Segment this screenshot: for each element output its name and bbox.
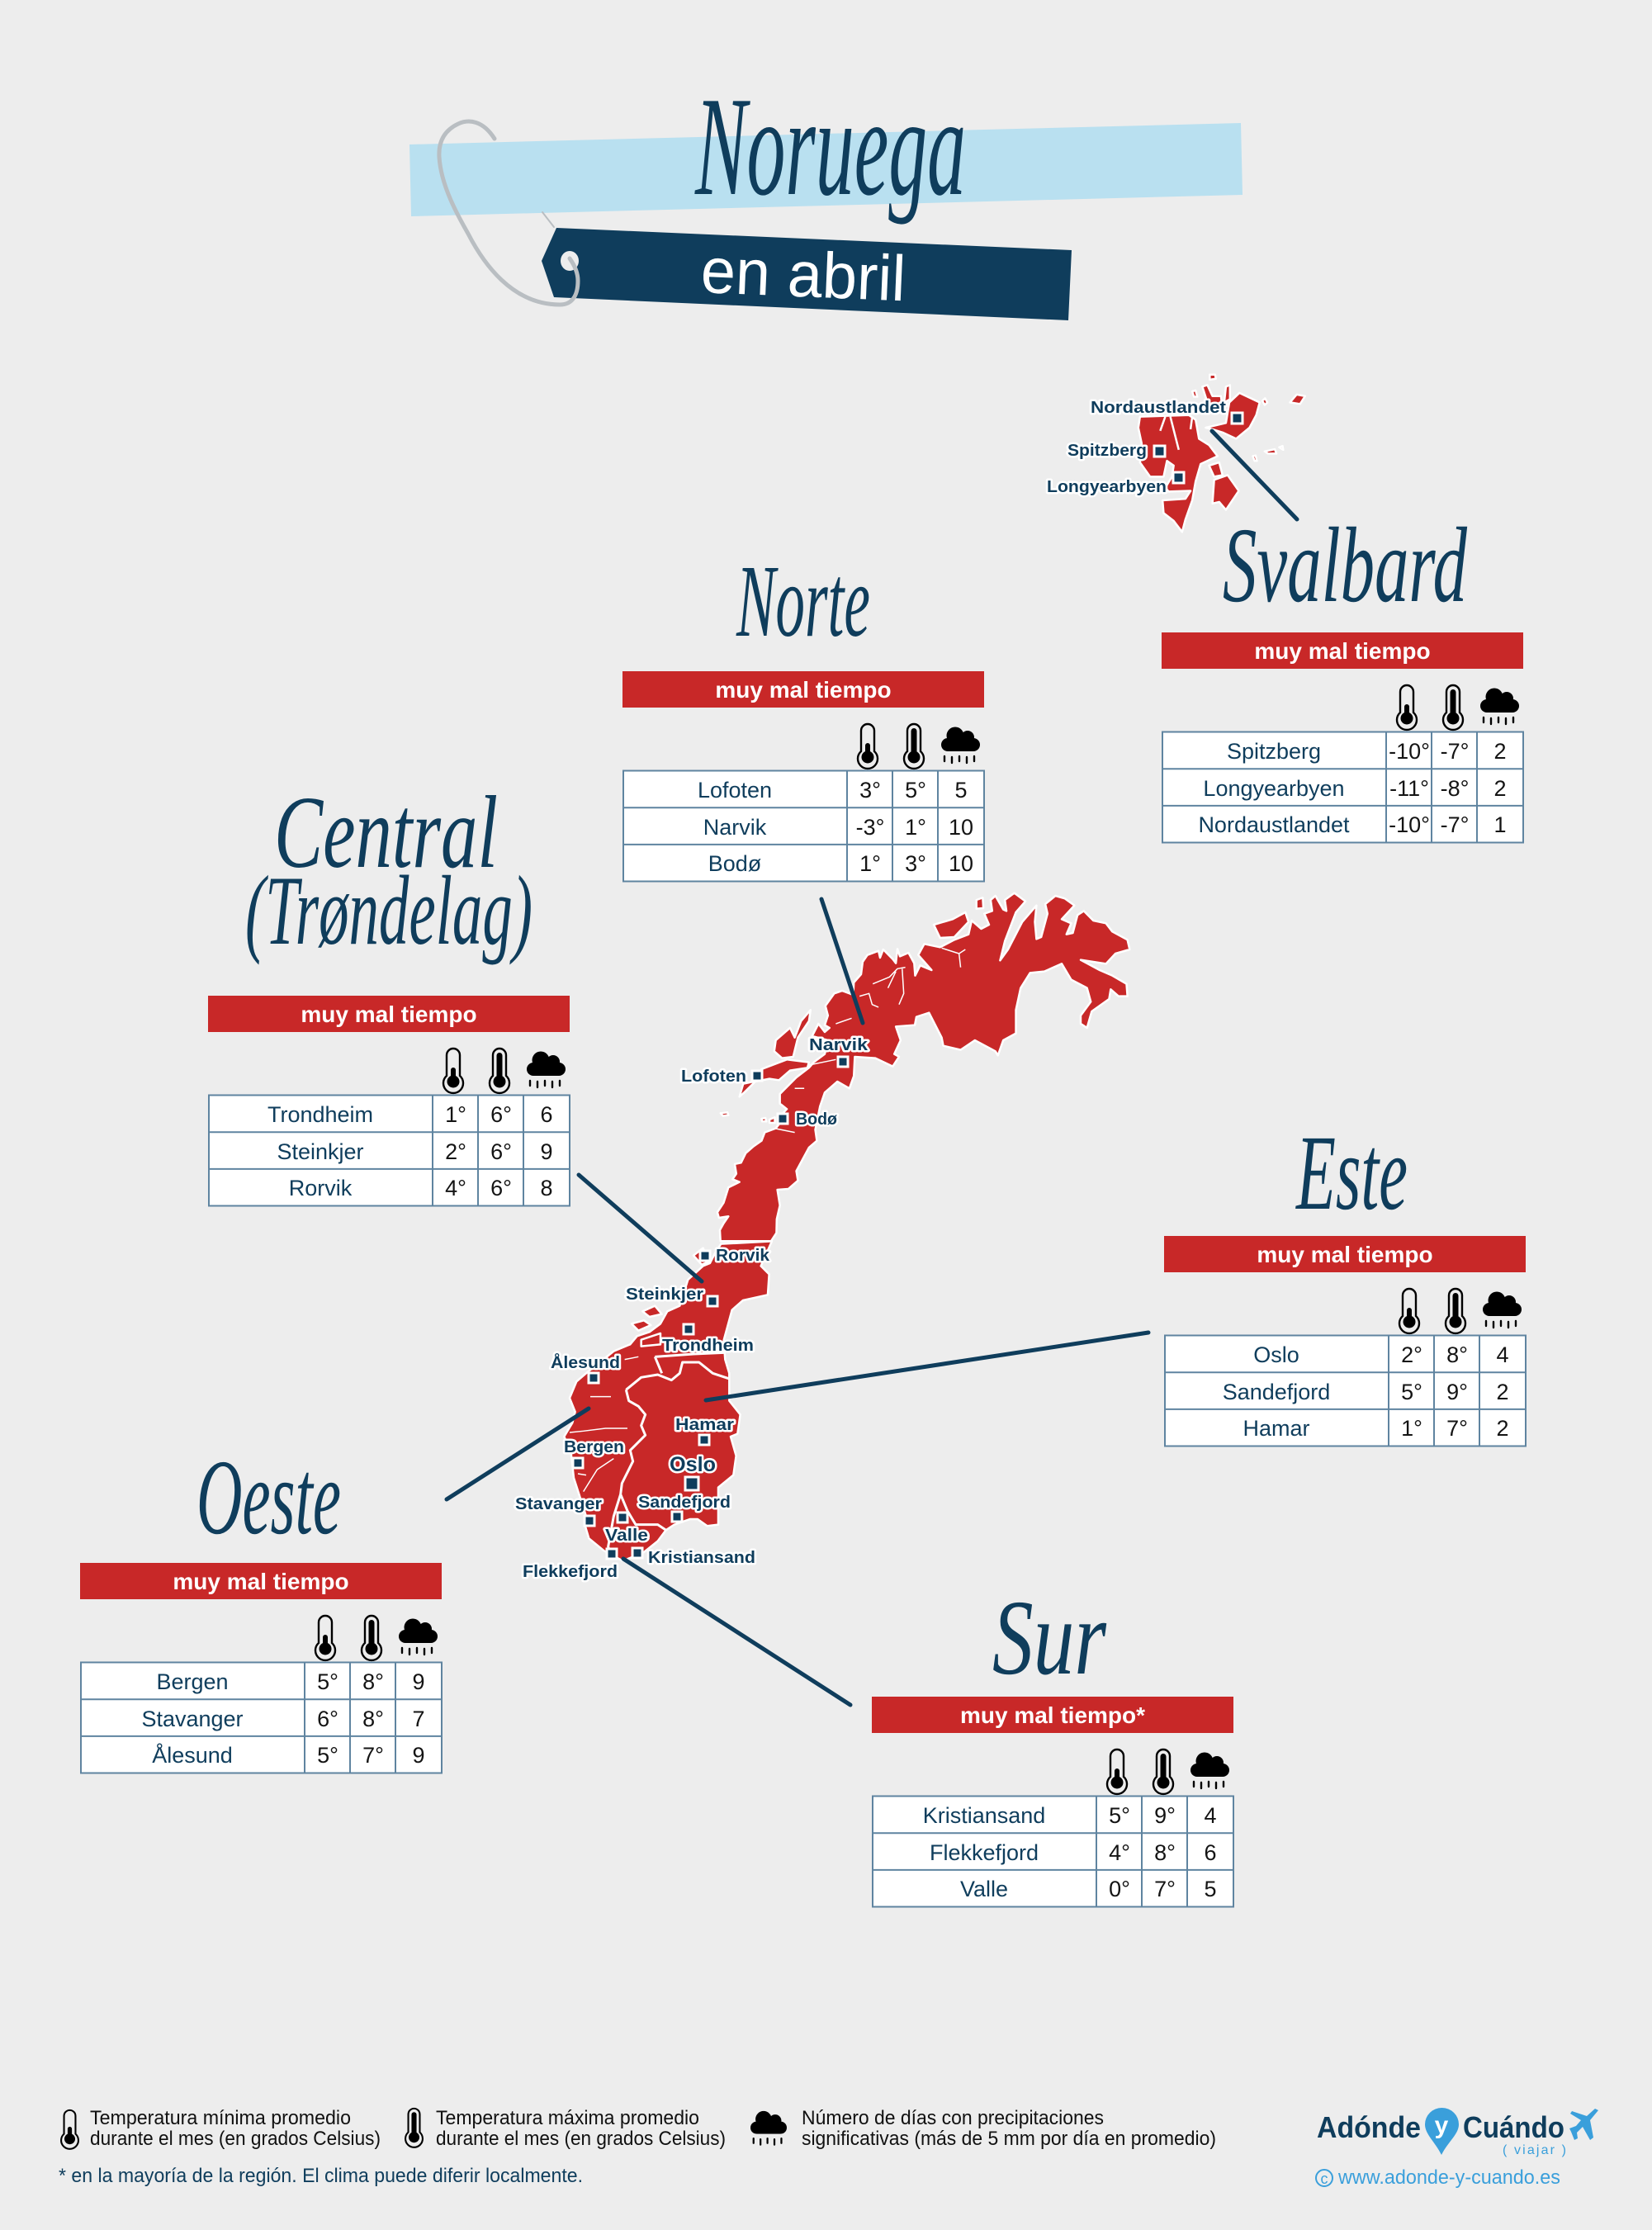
climate table: Rorvik xyxy=(289,1176,353,1200)
legend text: maximum temperature: Temperatura máxima promedio xyxy=(436,2107,699,2129)
label: Longyearbyen: Longyearbyen xyxy=(1047,478,1167,496)
climate table xyxy=(209,1095,570,1205)
panel: Este xyxy=(1164,1114,1526,1446)
leader line: Norte xyxy=(821,899,863,1023)
status band: muy mal tiempo xyxy=(173,1569,349,1594)
climate table: -10° xyxy=(1389,739,1430,764)
climate table: 9° xyxy=(1154,1803,1176,1828)
climate table: -10° xyxy=(1389,812,1430,837)
status band: muy mal tiempo xyxy=(1254,638,1431,664)
climate table: -8° xyxy=(1441,776,1469,801)
panel: Norte xyxy=(622,545,984,882)
marker: Rorvik xyxy=(700,1251,710,1261)
column icons xyxy=(858,724,980,769)
heading: Oeste: Oeste xyxy=(196,1438,341,1557)
legend text: precipitation xyxy=(802,2107,1216,2150)
marker: Nordaustlandet xyxy=(1232,413,1243,424)
legend text: minimum temperature xyxy=(90,2107,381,2150)
climate table: 8° xyxy=(362,1669,384,1694)
light blue title strip xyxy=(409,123,1243,216)
logo plane xyxy=(1569,2109,1598,2140)
climate table: 3° xyxy=(905,851,926,876)
climate table: 2 xyxy=(1496,1416,1509,1441)
climate table: Ålesund xyxy=(152,1742,233,1768)
climate table: Kristiansand xyxy=(923,1803,1045,1828)
climate table: 3° xyxy=(859,778,881,803)
leader line: Sur xyxy=(623,1559,850,1705)
climate table: 4 xyxy=(1496,1342,1509,1367)
climate table: Narvik xyxy=(703,815,767,840)
climate table: 4° xyxy=(1109,1840,1130,1865)
climate table: 8 xyxy=(540,1176,553,1200)
climate table: -11° xyxy=(1389,776,1429,801)
climate table: -7° xyxy=(1441,812,1469,837)
climate table: 6° xyxy=(317,1707,338,1731)
climate table: Bergen xyxy=(156,1669,229,1694)
leader line: Oeste xyxy=(447,1409,589,1499)
band and table: Oeste xyxy=(80,1563,442,1773)
climate table: 10 xyxy=(949,851,973,876)
label: Flekkefjord: Flekkefjord xyxy=(523,1563,618,1581)
marker: Lofoten xyxy=(752,1071,762,1081)
heading: Central (Trøndelag) xyxy=(245,776,533,965)
climate table: 10 xyxy=(949,815,973,840)
climate table: 5° xyxy=(317,1743,338,1768)
climate table: 8° xyxy=(362,1707,384,1731)
title block xyxy=(409,69,1243,320)
climate table: 8° xyxy=(1154,1840,1176,1865)
leader line: Central xyxy=(579,1175,702,1281)
climate table: 5 xyxy=(954,778,968,803)
label: Valle: Valle xyxy=(605,1527,648,1545)
climate table: 9 xyxy=(412,1743,425,1768)
label: Bergen: Bergen xyxy=(564,1438,624,1456)
band and table: Sur xyxy=(872,1697,1233,1907)
label: Stavanger: Stavanger xyxy=(515,1495,602,1513)
map of Svalbard xyxy=(1047,375,1305,532)
climate table: 2 xyxy=(1493,739,1507,764)
climate table xyxy=(623,771,984,882)
panel: Central (Trøndelag) xyxy=(208,776,570,1205)
climate table: 7° xyxy=(362,1743,384,1768)
label: Steinkjer: Steinkjer xyxy=(626,1285,703,1304)
climate table: 0° xyxy=(1109,1877,1130,1901)
marker: Spitzberg xyxy=(1154,446,1165,457)
legend text: minimum temperature: Temperatura mínima promedio xyxy=(90,2107,351,2129)
climate table: 5° xyxy=(1109,1803,1130,1828)
status band xyxy=(1162,632,1523,669)
climate table: Trondheim xyxy=(267,1102,373,1127)
status band: muy mal tiempo xyxy=(1257,1242,1433,1267)
climate table: 2 xyxy=(1496,1380,1509,1404)
climate table: Oslo xyxy=(1253,1342,1299,1367)
marker: Ålesund xyxy=(589,1373,599,1383)
climate table: Flekkefjord xyxy=(930,1840,1039,1865)
marker: Narvik xyxy=(838,1057,848,1067)
climate table: 2° xyxy=(1401,1342,1422,1367)
logo tagline: ( viajar ) xyxy=(1503,2143,1566,2157)
heading: Sur: Sur xyxy=(992,1579,1106,1697)
status band xyxy=(80,1563,442,1599)
legend text: maximum temperature: durante el mes (en grados Celsius) xyxy=(436,2128,726,2150)
climate table: 1° xyxy=(859,851,881,876)
column icons xyxy=(315,1616,438,1660)
marker: Kristiansand xyxy=(632,1548,642,1558)
southern Norway landmass xyxy=(564,1241,772,1560)
climate table: 9 xyxy=(412,1669,425,1694)
climate table: Valle xyxy=(960,1877,1008,1901)
climate table: 4 xyxy=(1204,1803,1217,1828)
marker: Valle xyxy=(618,1513,627,1522)
climate table: 7° xyxy=(1154,1877,1176,1901)
climate table: 5° xyxy=(317,1669,338,1694)
legend text: minimum temperature: durante el mes (en grados Celsius) xyxy=(90,2128,381,2150)
legend text: precipitation: significativas (más de 5 mm por día en promedio) xyxy=(802,2128,1216,2150)
climate table xyxy=(873,1797,1233,1907)
label: Hamar: Hamar xyxy=(675,1416,734,1434)
logo word: Cuándo: Cuándo xyxy=(1463,2110,1564,2144)
label: Ålesund: Ålesund xyxy=(551,1352,620,1372)
climate table: 7 xyxy=(412,1707,425,1731)
legend xyxy=(59,2107,1216,2187)
climate table: 4° xyxy=(445,1176,466,1200)
climate table: -7° xyxy=(1441,739,1469,764)
copyright and website: c xyxy=(1321,2171,1328,2187)
climate table: 6° xyxy=(490,1102,512,1127)
climate table: Nordaustlandet xyxy=(1198,812,1350,837)
subtitle: en abril: en abril xyxy=(699,234,907,315)
climate table: 1° xyxy=(1401,1416,1422,1441)
climate table: 9 xyxy=(540,1139,553,1164)
marker: Bergen xyxy=(573,1458,583,1468)
marker: Longyearbyen xyxy=(1173,472,1184,483)
climate table: Spitzberg xyxy=(1227,739,1321,764)
heading: Norte: Norte xyxy=(736,545,870,659)
column icons xyxy=(443,1049,566,1093)
legend icon: precipitation xyxy=(750,2111,787,2145)
marker: Sandefjord xyxy=(672,1512,682,1522)
climate table: Lofoten xyxy=(698,778,772,803)
status band xyxy=(1164,1236,1526,1272)
climate table: 5 xyxy=(1204,1877,1217,1901)
climate table: -3° xyxy=(856,815,884,840)
climate table: 9° xyxy=(1446,1380,1468,1404)
marker: Stavanger xyxy=(585,1516,594,1526)
map of mainland Norway xyxy=(515,893,1129,1581)
band and table: Central xyxy=(208,996,570,1205)
marker: Trondheim xyxy=(684,1324,693,1334)
status band xyxy=(208,996,570,1032)
status band: muy mal tiempo xyxy=(715,677,892,703)
label: Trondheim: Trondheim xyxy=(662,1337,754,1355)
climate table: Stavanger xyxy=(141,1707,244,1731)
heading: Svalbard: Svalbard xyxy=(1223,506,1468,625)
climate table: 1° xyxy=(905,815,926,840)
legend text: precipitation: Número de días con precipitaciones xyxy=(802,2107,1104,2129)
region dividers xyxy=(608,1352,729,1555)
footnote: * en la mayoría de la región. El clima puede diferir localmente. xyxy=(59,2165,583,2187)
climate table: Sandefjord xyxy=(1223,1380,1330,1404)
climate table: 6° xyxy=(490,1139,512,1164)
tag string xyxy=(439,121,578,305)
title: Noruega: Noruega xyxy=(694,69,966,225)
status band: muy mal tiempo xyxy=(301,1001,477,1027)
climate table: 8° xyxy=(1446,1342,1468,1367)
label: Rorvik: Rorvik xyxy=(716,1247,770,1265)
band and table: Svalbard xyxy=(1162,632,1523,842)
panel: Oeste xyxy=(80,1438,442,1773)
status band xyxy=(622,671,984,708)
marker: Flekkefjord xyxy=(607,1549,617,1559)
svalbard landmass xyxy=(1138,375,1305,532)
marker: Bodø xyxy=(778,1114,788,1124)
panel: Sur xyxy=(872,1579,1233,1907)
northern Norway landmass xyxy=(717,893,1129,1241)
logo word: Adónde: Adónde xyxy=(1317,2110,1421,2144)
marker: Oslo xyxy=(685,1477,698,1490)
legend icon: minimum temperature xyxy=(61,2110,78,2149)
logo pin xyxy=(1425,2108,1459,2155)
column icons xyxy=(1399,1289,1522,1333)
climate table: 6 xyxy=(540,1102,553,1127)
marker: Hamar xyxy=(699,1435,709,1445)
climate table xyxy=(81,1663,442,1773)
column icons xyxy=(1397,685,1519,730)
label: Lofoten: Lofoten xyxy=(681,1068,746,1086)
leader line: Este xyxy=(706,1333,1148,1400)
band and table: Norte xyxy=(622,671,984,882)
climate table: 2° xyxy=(445,1139,466,1164)
climate table xyxy=(1162,731,1523,842)
climate table: 1 xyxy=(1493,812,1507,837)
climate table: Steinkjer xyxy=(277,1139,364,1164)
climate table: Longyearbyen xyxy=(1203,776,1345,801)
climate table: 6 xyxy=(1204,1840,1217,1865)
band and table: Este xyxy=(1164,1236,1526,1446)
climate table: 1° xyxy=(445,1102,466,1127)
label: Kristiansand: Kristiansand xyxy=(648,1549,755,1567)
label: Sandefjord: Sandefjord xyxy=(638,1494,731,1512)
heading: Este: Este xyxy=(1295,1114,1408,1233)
status band: muy mal tiempo* xyxy=(960,1702,1145,1728)
heading: Central (Trøndelag): (Trøndelag) xyxy=(245,855,533,965)
legend text: maximum temperature xyxy=(436,2107,726,2150)
legend icon: maximum temperature xyxy=(405,2109,423,2147)
label: Spitzberg: Spitzberg xyxy=(1067,442,1147,460)
status band xyxy=(872,1697,1233,1733)
climate table: Hamar xyxy=(1243,1416,1310,1441)
panel: Svalbard xyxy=(1162,506,1523,842)
climate table: 5° xyxy=(1401,1380,1422,1404)
logo letter: y: y xyxy=(1435,2112,1449,2139)
logo: Adónde y Cuándo xyxy=(1316,2108,1598,2189)
label: Nordaustlandet: Nordaustlandet xyxy=(1091,399,1226,417)
leader line: Svalbard xyxy=(1212,431,1297,519)
copyright and website: www.adonde-y-cuando.es xyxy=(1337,2166,1560,2189)
climate table: 6° xyxy=(490,1176,512,1200)
label: Oslo: Oslo xyxy=(670,1453,716,1476)
label: Narvik: Narvik xyxy=(809,1036,869,1054)
climate table: 5° xyxy=(905,778,926,803)
climate table: 7° xyxy=(1446,1416,1468,1441)
climate table: 2 xyxy=(1493,776,1507,801)
tag hole xyxy=(561,251,579,271)
column icons xyxy=(1107,1749,1229,1794)
heading: Central (Trøndelag): Central xyxy=(274,776,498,890)
marker: Steinkjer xyxy=(708,1296,717,1306)
label: Bodø: Bodø xyxy=(796,1110,838,1129)
climate table xyxy=(1165,1336,1526,1446)
climate table: Bodø xyxy=(708,851,761,876)
luggage tag xyxy=(542,228,1072,320)
